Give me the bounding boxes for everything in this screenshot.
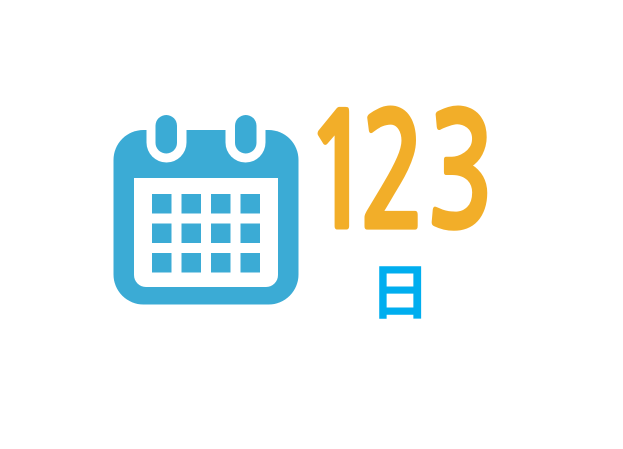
number: 123: 2 (359, 96, 427, 252)
number: 123 (303, 95, 496, 252)
icon: calendar (114, 115, 298, 304)
number: 123: 3 (426, 95, 496, 252)
unit label: 日: 日 (370, 260, 430, 327)
number: 123: 1 (303, 95, 375, 252)
